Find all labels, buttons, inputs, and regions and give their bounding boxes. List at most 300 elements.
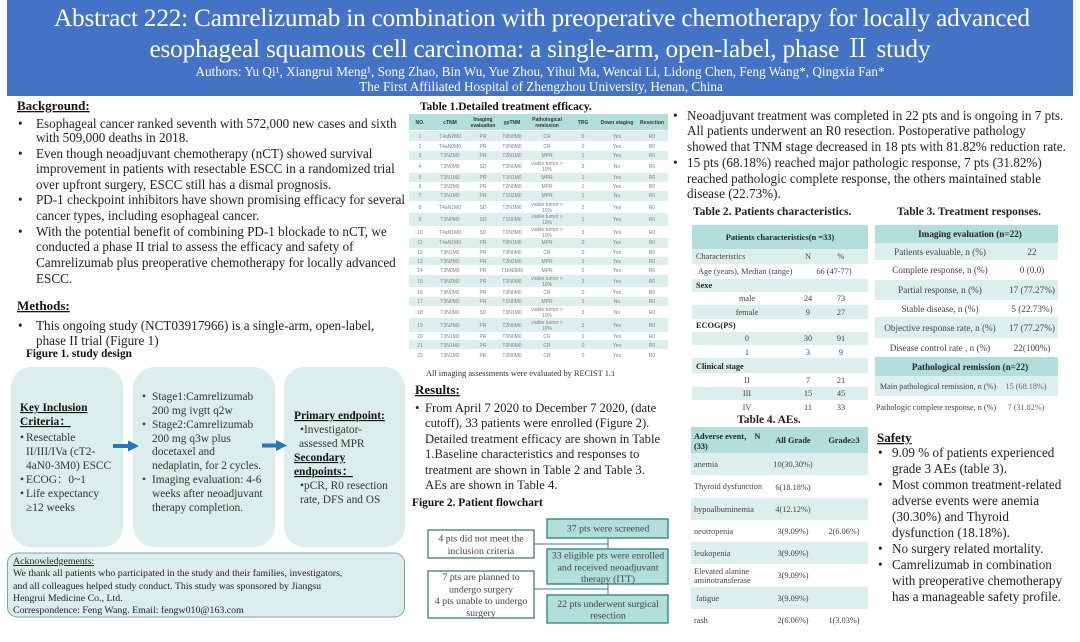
table 1: treatment efficacy: PR <box>480 268 487 274</box>
table 1: treatment efficacy: Yes <box>613 205 622 211</box>
table 1: treatment efficacy: 5 <box>419 175 422 181</box>
figure 1: endpoints box: Secondary <box>294 452 346 464</box>
table 2: patient characteristics: 0 <box>745 334 749 343</box>
figure 1: inclusion criteria box <box>11 367 123 547</box>
table 1: treatment efficacy: T2N0M0 <box>502 323 522 329</box>
figure 1: treatment box: Stage1:Camrelizumab <box>152 391 254 403</box>
table 1: treatment efficacy: T4aN1M0 <box>439 230 461 236</box>
table 1: treatment efficacy: T0N0M0 <box>502 343 522 349</box>
table 1: treatment efficacy: T4aN0M0 <box>439 144 461 150</box>
table 2: patient characteristics: 66 (47-77) <box>816 267 852 276</box>
table 2: patient characteristics: Age (years), Median (range) <box>698 267 793 276</box>
table 4: adverse events: neutropenia <box>694 527 733 536</box>
figure 1: inclusion criteria box: ≥12 weeks <box>26 502 76 514</box>
safety bullets: Most common treatment-related <box>892 477 1062 492</box>
table 1: treatment efficacy: T1N0M0 <box>502 299 522 305</box>
flow: excluded: inclusion criteria <box>448 546 515 557</box>
table 1 heading: Table 1.Detailed treatment efficacy. <box>420 101 592 113</box>
table 1: treatment efficacy: R0 <box>649 268 655 274</box>
table 1: treatment efficacy: T3N0M0 <box>440 310 460 316</box>
table 1: treatment efficacy: Yes <box>613 353 622 359</box>
table 1: treatment efficacy: viable tumor > <box>531 227 563 233</box>
figure 1: treatment box: weeks after neoadjuvant <box>152 488 264 500</box>
table 1: treatment efficacy: viable tumor > <box>531 202 563 208</box>
table 1: treatment efficacy: PR <box>480 193 487 199</box>
table 1: treatment efficacy: PR <box>480 299 487 305</box>
table 3: treatment responses: Pathologic complete response, n (%) <box>876 403 996 412</box>
table 1: treatment efficacy: T3N2M0 <box>440 153 460 159</box>
results text: treatment are shown in Table 2 and Table 3. <box>425 463 645 477</box>
results text: 1.Baseline characteristics and responses to <box>425 447 639 461</box>
safety bullets: Camrelizumab in combination <box>892 557 1052 572</box>
table 1: treatment efficacy: R0 <box>649 205 655 211</box>
background bullets <box>18 116 405 286</box>
table 1: treatment efficacy: Yes <box>613 240 622 246</box>
table 4: adverse events: 3(9.09%) <box>777 549 809 558</box>
table 1: treatment efficacy: SD <box>480 205 487 211</box>
table 1: treatment efficacy: T2N2M0 <box>502 259 522 265</box>
table 3: treatment responses: 22(100%) <box>1014 343 1050 353</box>
table 1: treatment efficacy: Resection <box>640 120 664 126</box>
figure 1: treatment box: Stage2:Camrelizumab <box>152 419 254 431</box>
table 1: treatment efficacy: 3 <box>582 310 585 316</box>
table 1: treatment efficacy: 0 <box>582 334 585 340</box>
table 1: treatment efficacy: R0 <box>649 217 655 223</box>
table 1: treatment efficacy: No <box>614 299 620 305</box>
table 1: treatment efficacy: 7 <box>419 193 422 199</box>
table 1: treatment efficacy: Pathological <box>532 117 562 123</box>
table 1: treatment efficacy: CR <box>543 334 551 340</box>
table 1: treatment efficacy: Yes <box>613 343 622 349</box>
flow: resection: 22 pts underwent surgical <box>557 599 659 610</box>
header banner <box>7 0 1073 96</box>
table 1: treatment efficacy: 13 <box>417 259 423 265</box>
table 1: treatment efficacy: Yes <box>613 175 622 181</box>
flow: enrolled: therapy (ITT) <box>581 574 635 585</box>
table 3: treatment responses: Imaging evaluation (n=22) <box>918 229 1022 239</box>
table 1: treatment efficacy: 10% <box>542 326 553 332</box>
flow: excluded <box>428 530 534 558</box>
table 1: treatment efficacy: CR <box>543 353 551 359</box>
results heading: Results: <box>415 382 460 397</box>
safety bullets: 9.09 % of patients experienced <box>892 445 1055 460</box>
table 2: patient characteristics: II <box>744 376 750 385</box>
table 2: patient characteristics: 73 <box>837 294 845 303</box>
methods text: • <box>18 318 23 333</box>
table 1: treatment efficacy: T0N0M0 <box>502 134 522 140</box>
table 1: treatment efficacy: Yes <box>613 323 622 329</box>
flow: not operated: surgery <box>466 608 496 619</box>
table 3: treatment responses: Complete response, n (%) <box>892 265 988 275</box>
title <box>54 4 1030 63</box>
table 1: treatment efficacy: R0 <box>649 299 655 305</box>
figure 2: patient flowchart <box>428 519 668 623</box>
panel: methods <box>17 298 374 348</box>
safety bullets: (30.30%) and Thyroid <box>892 509 1009 524</box>
table 1: treatment efficacy: R0 <box>649 343 655 349</box>
table 4: adverse events: aminotransferase <box>694 576 751 585</box>
table 1: treatment efficacy: T3N1M0 <box>440 334 460 340</box>
table 1: treatment efficacy: MPR <box>541 153 553 159</box>
table 1: treatment efficacy: R0 <box>649 184 655 190</box>
table 3: treatment responses: 7 (31.82%) <box>1008 403 1045 412</box>
table 1: treatment efficacy: R0 <box>649 259 655 265</box>
table 1: treatment efficacy: 1 <box>582 217 585 223</box>
table 1: treatment efficacy: T4aN1M0 <box>439 240 461 246</box>
table 1: treatment efficacy: Imaging <box>473 117 493 123</box>
table 4: adverse events: Thyroid dysfunction <box>694 482 763 491</box>
table 1: treatment efficacy: 15 <box>417 279 423 285</box>
table 1: treatment efficacy: 21 <box>417 343 423 349</box>
results text: From April 7 2020 to December 7 2020, (date <box>425 401 657 415</box>
table 1: treatment efficacy: T3N0M0 <box>440 290 460 296</box>
table 1: treatment efficacy: PR <box>480 184 487 190</box>
flow: enrolled: 33 eligible pts were enrolled <box>552 550 664 562</box>
table 1: treatment efficacy: R0 <box>649 240 655 246</box>
table 1: treatment efficacy: T2N1M0 <box>502 205 522 211</box>
table 1: treatment efficacy: 1 <box>582 299 585 305</box>
acknowledgements box: We thank all patients who participated in the study and their families, investigators, <box>13 568 342 579</box>
table 1: treatment efficacy: PR <box>480 153 487 159</box>
table 1: treatment efficacy: 1 <box>419 134 422 140</box>
figure 1: treatment box: nedaplatin, for 2 cycles. <box>152 460 261 472</box>
figure 1: endpoints box <box>284 367 405 547</box>
table 1: treatment efficacy: 0 <box>582 240 585 246</box>
table 1: treatment efficacy: Yes <box>613 134 622 140</box>
table 1: treatment efficacy: 17 <box>417 299 423 305</box>
table 1: treatment efficacy: CR <box>543 134 551 140</box>
acknowledgements box: Acknowledgements: <box>13 556 94 567</box>
table 2: patient characteristics: Characteristics <box>696 252 745 261</box>
table 1: treatment efficacy: T0N0M0 <box>502 290 522 296</box>
table 1: treatment efficacy: T1N3M0 <box>502 230 522 236</box>
table 4: adverse events: 3(9.09%) <box>777 571 809 580</box>
results text <box>415 401 660 492</box>
table 1: treatment efficacy: 1 <box>582 184 585 190</box>
table 2: patient characteristics: 3 <box>806 348 810 357</box>
table 1: treatment efficacy: T3N2M0 <box>440 259 460 265</box>
safety bullets: • <box>878 557 883 572</box>
table 1: treatment efficacy: R0 <box>649 334 655 340</box>
table 1: treatment efficacy: Yes <box>613 184 622 190</box>
table 1 footnote: All imaging assessments were evaluated by RECIST 1.1 <box>426 369 615 378</box>
table 1: treatment efficacy: PR <box>480 134 487 140</box>
table 1: treatment efficacy: 10% <box>542 282 553 288</box>
table 1: treatment efficacy: Yes <box>613 153 622 159</box>
table 1: treatment efficacy: T3N2M0 <box>440 279 460 285</box>
flow: not operated: 4 pts unable to undergo <box>435 596 527 607</box>
figure 1: inclusion criteria box: • <box>20 488 24 500</box>
table 1: treatment efficacy: viable tumor > <box>531 320 563 326</box>
table 2: patient characteristics: IV <box>743 403 751 412</box>
background bullets: cancer types, including esophageal cancer. <box>36 208 259 223</box>
table 1: treatment efficacy: MPR <box>541 299 553 305</box>
table 2: patient characteristics: 33 <box>837 403 845 412</box>
panel: results continued: showed that TNM stage decreased in 18 pts with 81.82% reduction rate. <box>687 139 1066 154</box>
table 2 heading: Table 2. Patients characteristics. <box>693 206 851 218</box>
arrow: inclusion to treatment <box>113 440 139 452</box>
table 1: treatment efficacy: No <box>614 310 620 316</box>
table 2: patient characteristics: 91 <box>837 334 845 343</box>
table 1: treatment efficacy: R0 <box>649 323 655 329</box>
table 1: treatment efficacy: 0 <box>582 343 585 349</box>
table 1: treatment efficacy: PR <box>480 323 487 329</box>
table 4: adverse events: hypoalbuminemia <box>694 505 754 514</box>
table 1: treatment efficacy: SD <box>480 164 487 170</box>
table 1: treatment efficacy: 8 <box>419 205 422 211</box>
table 1: treatment efficacy: 12 <box>417 250 423 256</box>
figure 2 heading: Figure 2. Patient flowchart <box>412 497 543 509</box>
table 1: treatment efficacy: Yes <box>613 230 622 236</box>
panel: results continued: disease (22.73%). <box>687 186 781 201</box>
table 1: treatment efficacy: 1 <box>582 153 585 159</box>
background bullets: With the potential benefit of combining PD-1 blockade to nCT, we <box>36 224 387 239</box>
table 2: patient characteristics: 7 <box>806 376 810 385</box>
background bullets: over upfront surgery, ESCC still has a dismal prognosis. <box>36 177 331 192</box>
table 1: treatment efficacy: T1N1M0 <box>502 175 522 181</box>
table 1: treatment efficacy: Down staging <box>601 120 633 126</box>
table 3: treatment responses: Partial response, n (%) <box>898 285 982 295</box>
table 1: treatment efficacy: 18 <box>417 310 423 316</box>
table 1: treatment efficacy: R0 <box>649 250 655 256</box>
background bullets: PD-1 checkpoint inhibitors have shown promising efficacy for several <box>36 192 405 207</box>
table 1: treatment efficacy: MPR <box>541 175 553 181</box>
safety bullets <box>878 445 1062 604</box>
table 1: treatment efficacy: PR <box>480 290 487 296</box>
table 3: treatment responses: Patients evaluable, n (%) <box>894 247 986 257</box>
table 1: treatment efficacy: cTNM <box>443 120 457 126</box>
figure 1: treatment box: • <box>142 474 146 486</box>
flow: enrolled <box>547 549 668 585</box>
arrow: treatment to endpoints <box>262 440 287 451</box>
table 1: treatment efficacy: 16 <box>417 290 423 296</box>
table 1: treatment efficacy: PR <box>480 259 487 265</box>
table 4: adverse events: 6(18.18%) <box>775 483 811 492</box>
table 3: treatment responses: Stable disease, n (%) <box>901 304 979 314</box>
table 1: treatment efficacy: PR <box>480 353 487 359</box>
table 1: treatment efficacy: 0 <box>582 144 585 150</box>
background bullets: • <box>18 116 23 131</box>
background bullets: • <box>18 146 23 161</box>
panel: results continued: Neoadjuvant treatment was completed in 22 pts and is ongoing in 7 pts. <box>687 108 1063 123</box>
table 1: treatment efficacy: Yes <box>613 290 622 296</box>
table 1: treatment efficacy: PR <box>480 343 487 349</box>
table 1: treatment efficacy: SD <box>480 217 487 223</box>
background bullets: • <box>18 192 23 207</box>
background heading: Background: <box>17 98 90 113</box>
table 1: treatment efficacy: remission <box>535 123 559 129</box>
figure 1: inclusion criteria box: 4aN0-3M0) ESCC <box>26 460 111 472</box>
acknowledgements box <box>8 553 404 617</box>
table 1: treatment efficacy: CR <box>543 343 551 349</box>
safety bullets: No surgery related mortality. <box>892 541 1043 556</box>
figure 1: inclusion criteria box: Criteria： <box>20 416 71 428</box>
figure 1: treatment box: therapy completion. <box>152 502 243 514</box>
table 1: treatment efficacy: 9 <box>419 217 422 223</box>
table 1: treatment efficacy: PR <box>480 250 487 256</box>
table 4: adverse events: (33) <box>694 442 708 451</box>
table 1: treatment efficacy: T0N1M0 <box>502 240 522 246</box>
table 4: adverse events: 2(6.06%) <box>777 616 809 625</box>
methods text: This ongoing study (NCT03917966) is a single-arm, open-label, <box>36 318 374 333</box>
panel: results continued: reached pathologic complete response, the others maintained stable <box>687 171 1041 186</box>
safety bullets: grade 3 AEs (table 3). <box>892 461 1007 476</box>
table 4: adverse events: 2(6.06%) <box>828 527 860 536</box>
table 3: treatment responses: 15 (68.18%) <box>1006 382 1047 391</box>
flow: not operated <box>428 571 534 619</box>
background bullets: conducted a phase II trial to assess the efficacy and safety of <box>36 239 354 254</box>
flow: excluded: 4 pts did not meet the <box>438 534 524 544</box>
table 1: treatment efficacy: 10 <box>417 230 423 236</box>
table 2: patient characteristics: 45 <box>837 389 845 398</box>
table 1: treatment efficacy: R0 <box>649 144 655 150</box>
table 1: treatment efficacy: Yes <box>613 144 622 150</box>
table 1: treatment efficacy: NO. <box>416 120 425 126</box>
figure 1: inclusion criteria box: Resectable <box>26 432 75 444</box>
figure 1: endpoints box: •Investigator- <box>300 424 362 436</box>
figure 1: inclusion criteria box: Life expectancy <box>26 488 99 500</box>
table 4: adverse events: Elevated alanine <box>694 567 749 576</box>
table 2: patient characteristics: 24 <box>804 294 813 303</box>
table 2: patient characteristics: male <box>739 294 755 303</box>
table 4: adverse events: Adverse event， N <box>694 432 760 442</box>
figure 1: treatment box: Imaging evaluation: 4-6 <box>152 474 262 486</box>
table 1: treatment efficacy: No <box>614 164 620 170</box>
table 3: treatment responses: 17 (77.27%) <box>1009 323 1055 333</box>
acknowledgements box: Correspondence: Feng Wang. Email: fengw010@163.com <box>13 605 244 616</box>
table 1: treatment efficacy: 3 <box>582 279 585 285</box>
table 4: adverse events: anemia <box>694 460 718 469</box>
table 3: treatment responses: Main pathological remission, n (%) <box>880 382 996 391</box>
results text: Detailed treatment efficacy are shown in Table <box>425 432 660 446</box>
table 1: treatment efficacy: 22 <box>417 353 423 359</box>
panel: results continued: All patients underwent an R0 resection. Postoperative pathology <box>687 123 1026 138</box>
table 2: patient characteristics: N <box>805 252 811 261</box>
table 2: patient characteristics: 27 <box>837 308 845 317</box>
table 1: treatment efficacy: 1 <box>582 193 585 199</box>
table 1: treatment efficacy: CR <box>543 144 551 150</box>
table 1: treatment efficacy: 0 <box>582 290 585 296</box>
table 1: treatment efficacy: R0 <box>649 353 655 359</box>
table 1: treatment efficacy: R0 <box>649 279 655 285</box>
table 1: treatment efficacy: R0 <box>649 193 655 199</box>
acknowledgements box: Hengrui Medicine Co., Ltd. <box>13 593 123 604</box>
safety bullets: has a manageable safety profile. <box>892 589 1061 604</box>
figure 1: treatment box: 200 mg ivgtt q2w <box>152 405 233 417</box>
table 1: treatment efficacy: T2N0M0 <box>502 279 522 285</box>
table 1: treatment efficacy: T2N1M0 <box>502 153 522 159</box>
table 4: adverse events: 4(12.12%) <box>775 505 811 514</box>
methods heading: Methods: <box>17 298 70 313</box>
table 1: treatment efficacy: viable tumor > <box>531 307 563 313</box>
figure 1: treatment box: • <box>142 419 146 431</box>
panel: safety <box>877 430 1062 604</box>
table 4: adverse events: Grade≥3 <box>828 436 860 445</box>
table 1: treatment efficacy: 0 <box>582 250 585 256</box>
table 4: adverse events: All Grade <box>775 436 811 445</box>
table 2: patient characteristics: Patients characteristics(n =33) <box>726 233 834 242</box>
figure 1: endpoints box: •pCR, R0 resection <box>300 480 388 492</box>
table 2: patient characteristics: 11 <box>804 403 812 412</box>
table 1: treatment efficacy: Yes <box>613 279 622 285</box>
table 1: treatment efficacy: T3N2M0 <box>440 323 460 329</box>
table 1: treatment efficacy: PR <box>480 175 487 181</box>
figure 1: treatment box: 200 mg q3w plus <box>152 433 231 445</box>
methods text <box>18 318 374 348</box>
table 1: treatment efficacy: R0 <box>649 153 655 159</box>
table 2: patient characteristics <box>692 225 868 412</box>
table 1: treatment efficacy: R0 <box>649 134 655 140</box>
table 2: patient characteristics: 21 <box>837 376 845 385</box>
table 2: patient characteristics: Clinical stage <box>696 362 744 371</box>
table 1: treatment efficacy: 0 <box>582 353 585 359</box>
table 1: treatment efficacy: SD <box>480 230 487 236</box>
table 1: treatment efficacy: MPR <box>541 268 553 274</box>
safety bullets: with preoperative chemotherapy <box>892 573 1062 588</box>
methods text: phase II trial (Figure 1) <box>36 333 159 348</box>
table 1: treatment efficacy: MPR <box>541 259 553 265</box>
title: Abstract 222: Camrelizumab in combination with preoperative chemotherapy for locally advanced <box>54 4 1030 32</box>
table 4: adverse events: 3(9.09%) <box>777 527 809 536</box>
table 1: treatment efficacy: PR <box>480 279 487 285</box>
safety heading: Safety <box>877 430 912 445</box>
table 1: treatment efficacy: Yes <box>613 259 622 265</box>
panel: results continued: 15 pts (68.18%) reached major pathologic response, 7 pts (31.82%) <box>687 155 1042 170</box>
panel: results continued: • <box>673 108 678 123</box>
table 2: patient characteristics: 1 <box>745 348 749 357</box>
table 2: patient characteristics: female <box>736 308 759 317</box>
table 1: treatment efficacy: 3 <box>582 230 585 236</box>
table 2: patient characteristics: 30 <box>804 334 812 343</box>
table 1: treatment efficacy <box>409 114 668 359</box>
background bullets: Even though neoadjuvant chemotherapy (nCT) showed survival <box>36 146 373 161</box>
table 3: treatment responses: 5 (22.73%) <box>1011 304 1053 314</box>
figure 1: inclusion criteria box: II/III/IVa (cT2- <box>26 446 95 458</box>
authors: Authors: Yu Qi¹, Xiangrui Meng¹, Song Zhao, Bin Wu, Yue Zhou, Yihui Ma, Wencai Li, Lidong Chen, Feng Wang*, Qingxia Fan* <box>195 64 885 79</box>
table 1: treatment efficacy: T0N0M0 <box>502 144 522 150</box>
table 1: treatment efficacy: T1bN0M0 <box>501 268 523 274</box>
table 1: treatment efficacy: R0 <box>649 164 655 170</box>
flow: resection: resection <box>590 610 626 622</box>
table 1: treatment efficacy: T3N0M0 <box>440 299 460 305</box>
table 1: treatment efficacy: T1N2M0 <box>502 193 522 199</box>
table 1: treatment efficacy: T3N1M0 <box>440 175 460 181</box>
safety bullets: adverse events were anemia <box>892 493 1039 508</box>
table 3: treatment responses: Objective response rate, n (%) <box>884 323 996 333</box>
flow: enrolled: and received neoadjuvant <box>558 562 659 574</box>
table 1: treatment efficacy: viable tumor > <box>531 276 563 282</box>
table 1: treatment efficacy: viable tumor > <box>531 161 563 167</box>
table 1: treatment efficacy: T2N0M0 <box>440 164 460 170</box>
table 1: treatment efficacy: T3N1M0 <box>502 310 522 316</box>
table 1: treatment efficacy: ypTNM <box>504 120 520 126</box>
background bullets: Esophageal cancer ranked seventh with 572,000 new cases and sixth <box>36 116 397 131</box>
table 1: treatment efficacy: T3N0M0 <box>440 217 460 223</box>
table 1: treatment efficacy: 1 <box>582 259 585 265</box>
table 1: treatment efficacy: 4 <box>419 164 422 170</box>
table 1: treatment efficacy: Yes <box>613 334 622 340</box>
figure 1: endpoints box: endpoints： <box>294 466 353 478</box>
table 4: adverse events <box>691 427 868 625</box>
acknowledgements box: and all colleagues helped study conduct. This study was sponsored by Jiangsu <box>13 581 321 592</box>
table 1: treatment efficacy: viable tumor > <box>531 214 563 220</box>
table 1: treatment efficacy: PR <box>480 240 487 246</box>
table 1: treatment efficacy: 6 <box>419 184 422 190</box>
table 1: treatment efficacy: TRG <box>578 120 588 126</box>
table 2: patient characteristics: % <box>838 252 845 261</box>
table 1: treatment efficacy: T4aN2M0 <box>439 134 461 140</box>
table 3: treatment responses: 0 (0.0) <box>1020 265 1044 275</box>
